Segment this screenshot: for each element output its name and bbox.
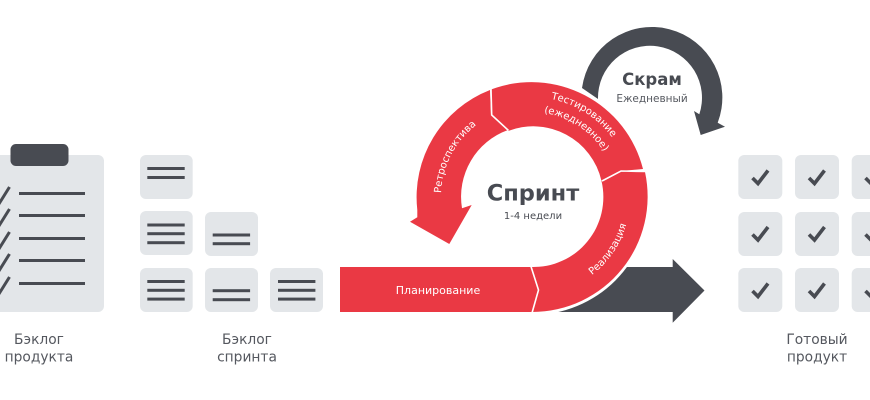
label: planning: Планирование (396, 284, 480, 297)
backlog check marks (0, 187, 10, 297)
backlog list lines (19, 192, 85, 285)
segment: testing (491, 82, 643, 181)
segment: realization (531, 171, 648, 312)
segment: retrospective arrow (410, 90, 508, 244)
gap around sprint ring (414, 79, 650, 315)
arrow: dark product arrow (540, 259, 704, 323)
arrow: scrum daily cycle (582, 27, 725, 135)
heading: scrum: Скрам (622, 70, 682, 89)
label: testing daily: (ежедневное) (545, 106, 609, 150)
label: realization: Реализация (588, 224, 626, 274)
label: sprint backlog: спринта (217, 350, 277, 366)
panel: product backlog clipboard (0, 144, 104, 312)
label: product backlog: продукта (5, 350, 73, 366)
panel: sprint cycle (340, 82, 648, 312)
label: finished product: Готовый (786, 332, 848, 348)
label: product backlog: Бэклог (14, 332, 64, 348)
segment: planning (340, 267, 538, 312)
panel: sprint backlog cards (140, 155, 323, 312)
heading: sprint: Спринт (487, 180, 579, 206)
label: finished product: продукт (787, 350, 847, 366)
panel: finished product cards (738, 155, 870, 312)
label: retrospective: Ретроспектива (434, 122, 476, 192)
icon: clipboard clip (10, 144, 68, 166)
label: sprint backlog: Бэклог (222, 332, 272, 348)
label: daily: Ежедневный (616, 93, 688, 105)
label: testing: Тестирование (552, 92, 616, 137)
label: sprint duration: 1-4 недели (504, 211, 562, 222)
